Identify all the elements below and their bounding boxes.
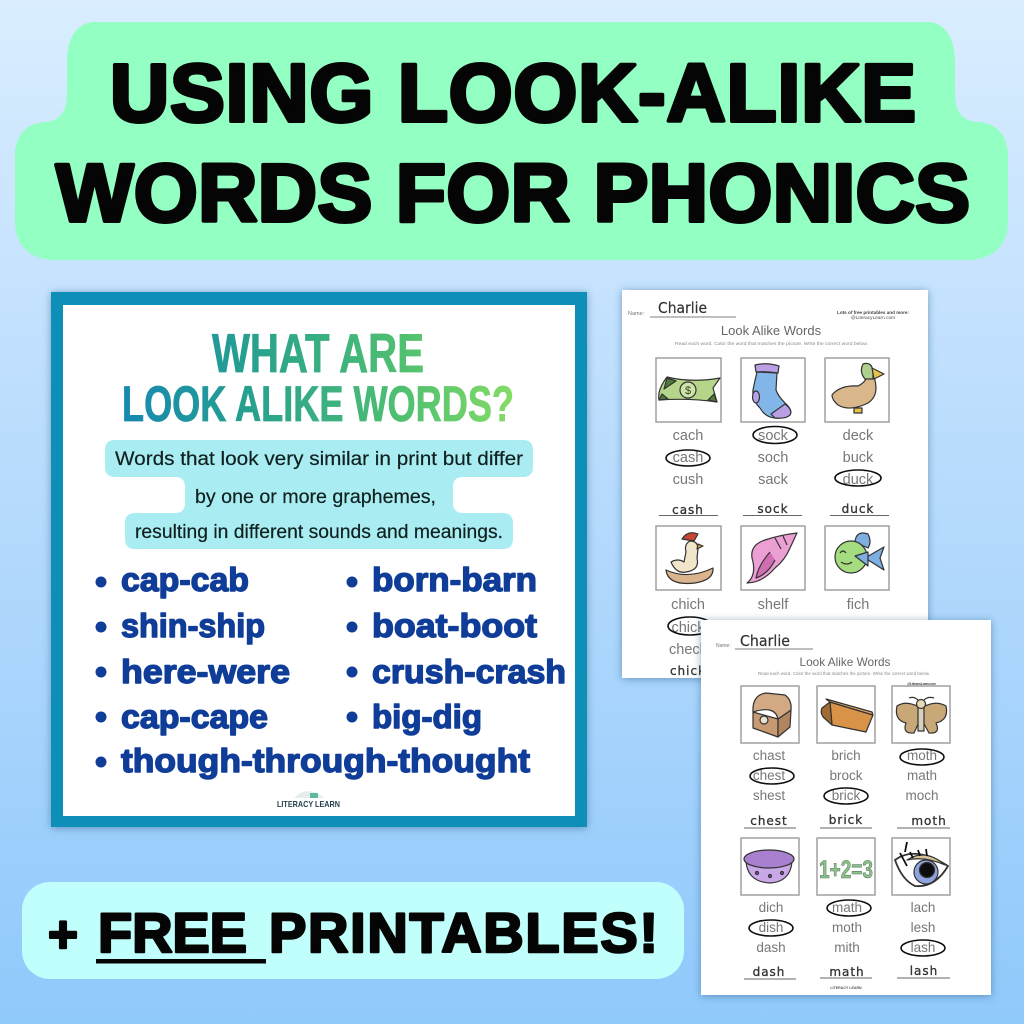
worksheet 2 handwritten answers: dash bbox=[753, 965, 785, 979]
definition highlight: by one or more graphemes, bbox=[195, 487, 436, 508]
worksheet 2 header: Look Alike Words bbox=[800, 655, 891, 669]
worksheet 2 word choices: chest bbox=[753, 768, 785, 783]
worksheet 1 word choices: fish bbox=[847, 620, 869, 636]
worksheet 2 header: Name: bbox=[716, 643, 731, 649]
worksheet 1 header: Name: bbox=[628, 311, 645, 317]
icon: pink shell bbox=[747, 533, 797, 583]
poster heading: WHAT ARE bbox=[212, 322, 424, 384]
panel: free printables callout: FREE bbox=[98, 901, 247, 964]
panel: what are look alike words poster bbox=[51, 292, 587, 827]
poster heading: LOOK ALIKE WORDS? bbox=[122, 376, 514, 432]
worksheet 2 word choices: lach bbox=[911, 900, 935, 915]
worksheet 2 word choices: shest bbox=[753, 788, 785, 803]
worksheet 2 footer logo: LITERACY LEARN bbox=[830, 986, 862, 990]
icon: hen on nest bbox=[666, 533, 713, 583]
word pair list: cap-cape bbox=[121, 698, 268, 735]
worksheet 1 header: Lots of free printables and more: bbox=[837, 310, 909, 315]
definition highlight: resulting in different sounds and meanings. bbox=[135, 522, 503, 543]
worksheet 1 picture boxes bbox=[656, 358, 889, 590]
worksheet 2 word choices: mith bbox=[834, 940, 860, 955]
worksheet 2 handwritten answers bbox=[744, 813, 950, 979]
icon: brick bbox=[821, 699, 873, 732]
icon: moth bbox=[896, 697, 947, 733]
worksheet 1 handwritten answers bbox=[659, 502, 889, 678]
worksheet page 1 bbox=[622, 290, 928, 678]
icon: sock bbox=[752, 364, 791, 418]
worksheet 2 word choices: lash bbox=[911, 940, 935, 955]
worksheet 1 word choices bbox=[666, 426, 881, 658]
worksheet 1 word choices: shell bbox=[758, 620, 788, 636]
literacy learn logo: LITERACY LEARN bbox=[277, 799, 340, 809]
worksheet 2 word choices: chast bbox=[753, 748, 785, 763]
title line 1: USING LOOK-ALIKE bbox=[110, 48, 916, 139]
worksheet 2 word choices: math bbox=[907, 768, 937, 783]
worksheet 1 word choices: shelf bbox=[758, 597, 789, 613]
word pair list: though-through-thought bbox=[121, 742, 530, 779]
word pair list: cap-cab bbox=[121, 561, 249, 598]
worksheet 2 word choices: brick bbox=[832, 788, 860, 803]
worksheet 1 header: Read each word. Color the word that matches the picture. Write the correct word below. bbox=[675, 341, 868, 347]
worksheet 2 word choices: brich bbox=[831, 748, 861, 763]
title line 2: WORDS FOR PHONICS bbox=[56, 148, 970, 239]
worksheet 1 word choices: cash bbox=[673, 450, 703, 466]
worksheet 2 word choices bbox=[749, 748, 945, 956]
panel: free printables callout: PRINTABLES! bbox=[269, 901, 658, 964]
worksheet 1 header: @LiteracyLearn.com bbox=[851, 315, 895, 320]
worksheet 2 header: Charlie bbox=[740, 632, 790, 650]
worksheet 1 handwritten answers: duck bbox=[842, 502, 874, 516]
worksheet 2 handwritten answers: moth bbox=[911, 814, 947, 828]
worksheet 1 word choices: chick bbox=[671, 620, 705, 636]
poster heading bbox=[122, 322, 514, 432]
worksheet 2 word choices: math bbox=[832, 900, 862, 915]
worksheet 1 word choices: fich bbox=[847, 597, 869, 613]
title banner bbox=[15, 22, 1008, 260]
worksheet 1 handwritten answers: sock bbox=[757, 502, 789, 516]
worksheet 1 header: Charlie bbox=[658, 299, 707, 317]
worksheet 1 word choices: cush bbox=[673, 472, 703, 488]
definition highlight: Words that look very similar in print but differ bbox=[115, 449, 524, 470]
word pair list: crush-crash bbox=[372, 653, 566, 690]
worksheet 1 header bbox=[628, 299, 909, 347]
worksheet 2 word choices: dish bbox=[759, 920, 783, 935]
word pair list bbox=[96, 561, 566, 779]
worksheet 2 word choices: moch bbox=[905, 788, 939, 803]
worksheet 2 word choices: dich bbox=[759, 900, 783, 915]
icon: eye with lash bbox=[895, 842, 948, 886]
word pair list: boat-boot bbox=[372, 607, 537, 644]
worksheet 2 handwritten answers: chest bbox=[750, 814, 788, 828]
worksheet 2 picture boxes bbox=[741, 686, 950, 895]
icon: math equation: 1+2=3 bbox=[819, 856, 873, 884]
worksheet 1 word choices: cach bbox=[673, 428, 703, 444]
panel: free printables callout: + bbox=[48, 906, 78, 964]
icon: dollar bill: $ bbox=[685, 385, 691, 397]
worksheet 2 header: Read each word. Color the word that matches the picture. Write the correct word below. bbox=[758, 671, 930, 676]
word pair list: born-barn bbox=[372, 561, 537, 598]
worksheet 2 word choices: lesh bbox=[911, 920, 935, 935]
worksheet 1 handwritten answers: cash bbox=[672, 503, 704, 517]
worksheet 1 word choices: check bbox=[669, 642, 708, 658]
worksheet 1 word choices: buck bbox=[843, 450, 874, 466]
icon: treasure chest bbox=[753, 693, 791, 737]
icon: dollar bill bbox=[659, 377, 720, 402]
worksheet 1 word choices: sack bbox=[758, 472, 789, 488]
worksheet page 2 bbox=[701, 620, 991, 995]
worksheet 2 word choices: brock bbox=[829, 768, 863, 783]
icon: duck bbox=[832, 363, 884, 413]
worksheet 1 word choices: duck bbox=[843, 472, 874, 488]
word pair list: shin-ship bbox=[121, 607, 265, 644]
worksheet 1 handwritten answers: chick bbox=[670, 664, 706, 678]
worksheet 2 word choices: moth bbox=[907, 748, 937, 763]
icon: green fish bbox=[835, 533, 884, 573]
worksheet 2 header: @LiteracyLearn.com bbox=[907, 682, 936, 686]
worksheet 2 word choices: moth bbox=[832, 920, 862, 935]
worksheet 2 handwritten answers: math bbox=[829, 965, 865, 979]
worksheet 1 header: Look Alike Words bbox=[721, 323, 822, 338]
worksheet 1 word choices: deck bbox=[843, 428, 874, 444]
worksheet 2 handwritten answers: lash bbox=[910, 964, 938, 978]
literacy learn logo bbox=[277, 791, 340, 809]
definition highlight bbox=[105, 440, 533, 549]
worksheet 1 word choices: chich bbox=[671, 597, 705, 613]
worksheet 1 word choices: sock bbox=[758, 428, 789, 444]
word pair list: here-were bbox=[121, 653, 290, 690]
panel: free printables callout bbox=[22, 882, 684, 979]
word pair list: big-dig bbox=[372, 698, 482, 735]
worksheet 2 handwritten answers: brick bbox=[829, 813, 863, 827]
icon: purple bowl bbox=[744, 850, 794, 883]
worksheet 2 header bbox=[716, 632, 936, 686]
worksheet 2 word choices: dash bbox=[756, 940, 786, 955]
worksheet 1 word choices: soch bbox=[758, 450, 788, 466]
